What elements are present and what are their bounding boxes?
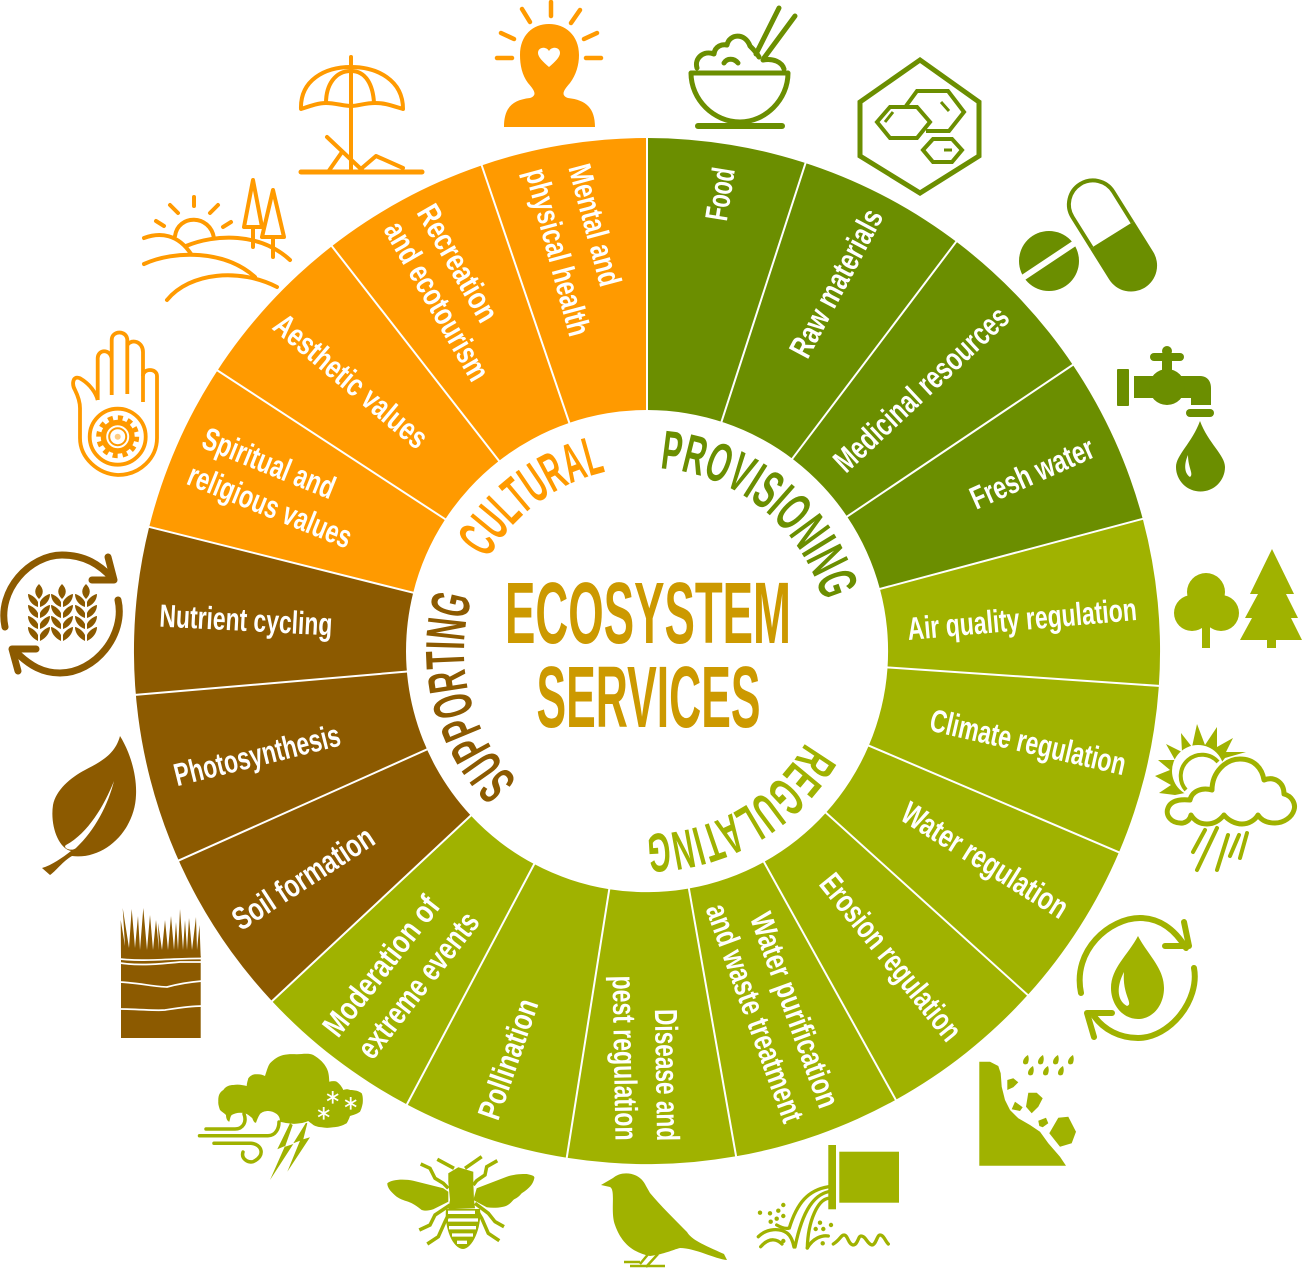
icon: hand with wheel (73, 332, 157, 475)
icon: nutrient cycle with wheat (4, 555, 119, 673)
icon: water cycle (1080, 918, 1195, 1038)
label: Air quality regulation: Air quality regulation (906, 591, 1138, 647)
icon: landscape with sun and trees (144, 180, 290, 300)
label: Spiritual and religious values: Spiritual and (197, 420, 341, 506)
label: Moderation of extreme events: extreme events (350, 905, 486, 1065)
icon: beach umbrella and chair (301, 57, 422, 172)
label: Water purification and waste treatment: and waste treatment (699, 899, 811, 1127)
icon: leaf (42, 736, 136, 875)
label: Food: Food (698, 165, 742, 223)
title: Ecosystem Services: SERVICES (536, 649, 760, 746)
icon: sun, cloud and rain (1155, 724, 1295, 870)
icon: raw materials hexagon (860, 60, 979, 193)
label: Medicinal resources: Medicinal resources (826, 299, 1016, 479)
label: Spiritual and religious values (183, 420, 357, 555)
label: Mental and physical health: Mental and (561, 160, 629, 290)
label: Recreation and ecotourism: Recreation (410, 198, 506, 328)
heading: CULTURAL: CULTURAL (460, 438, 605, 554)
panel: cultural sector (149, 138, 647, 593)
label: Moderation of extreme events (315, 889, 486, 1065)
panel: supporting sector (134, 527, 471, 1001)
icon: storm cloud (200, 1054, 363, 1180)
heading: REGULATING: REGULATING (648, 744, 836, 872)
label: Mental and physical health (518, 160, 629, 340)
label: Aesthetic values: Aesthetic values (267, 306, 435, 456)
panel: regulating sector (272, 519, 1160, 1164)
icon: trees (1174, 549, 1302, 648)
icon: soil layers with grass (120, 908, 202, 1038)
icon: water treatment outflow (758, 1145, 899, 1248)
label: Erosion regulation: Erosion regulation (813, 866, 969, 1048)
label: Disease and pest regulation (606, 975, 686, 1141)
title: Ecosystem Services: ECOSYSTEM (505, 565, 791, 662)
title: Ecosystem Services (505, 565, 791, 746)
label: Water regulation: Water regulation (895, 794, 1075, 926)
icon: head with heart and rays (497, 2, 601, 127)
label: Disease and pest regulation: Disease and (648, 1009, 686, 1141)
label: Recreation and ecotourism (377, 198, 506, 387)
label: Recreation and ecotourism: and ecotourism (377, 215, 497, 387)
icon: rice bowl with chopsticks (691, 8, 795, 126)
label: Disease and pest regulation: pest regulation (606, 975, 644, 1141)
label: Mental and physical health: physical health (518, 164, 598, 340)
label: Nutrient cycling: Nutrient cycling (159, 597, 333, 643)
icon: erosion (979, 1055, 1076, 1166)
panel: provisioning sector (647, 138, 1143, 589)
icon: pills (1019, 170, 1167, 301)
label: Fresh water: Fresh water (964, 430, 1100, 516)
label: Photosynthesis: Photosynthesis (170, 717, 344, 793)
label: Climate regulation: Climate regulation (927, 702, 1129, 782)
label: Soil formation: Soil formation (225, 819, 381, 937)
label: Spiritual and religious values: religious values (183, 457, 357, 555)
icon: bird (601, 1173, 727, 1267)
icon: bee (387, 1157, 534, 1249)
icon: tap and water drop (1117, 346, 1225, 492)
label: Moderation of extreme events: Moderation of (315, 889, 447, 1043)
heading: PROVISIONING: PROVISIONING (662, 430, 856, 598)
heading: SUPPORTING: SUPPORTING (426, 593, 514, 802)
label: Raw materials: Raw materials (782, 203, 890, 363)
label: Pollination: Pollination (471, 994, 545, 1124)
label: Water purification and waste treatment: Water purification (743, 908, 847, 1112)
